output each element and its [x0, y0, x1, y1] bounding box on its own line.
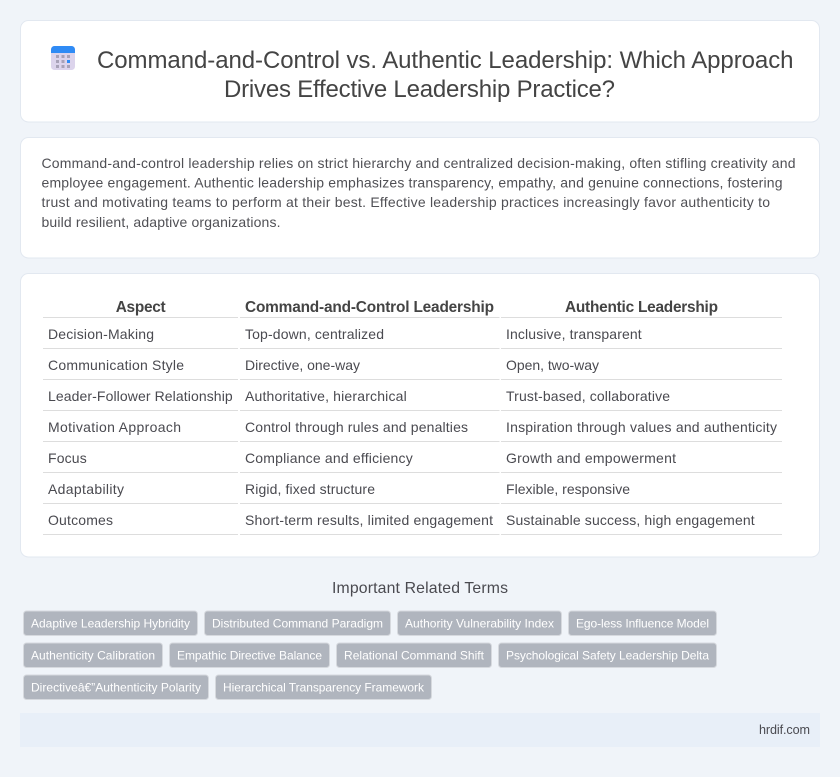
table row: decision-making: Inclusive, transparent: [506, 326, 642, 342]
panel: description: [20, 138, 820, 258]
tag: Authority Vulnerability Index: [405, 616, 554, 630]
tag: Directiveâ€”Authenticity Polarity: [31, 680, 201, 694]
text block: description: build resilient, adaptive organizations.: [42, 214, 280, 230]
title: Drives Effective Leadership Practice?: [224, 76, 615, 103]
table row: outcomes: Short-term results, limited engagement: [245, 512, 493, 528]
table row: communication style: Communication Style: [48, 357, 184, 373]
tag: [216, 675, 432, 700]
table row: decision-making: [48, 326, 642, 342]
tag: [170, 643, 330, 668]
title: Command-and-Control vs. Authentic Leadership: Which Approach: [97, 47, 794, 74]
table row: adaptability: [48, 481, 630, 497]
panel: comparison table: [20, 274, 820, 557]
tag: [568, 611, 716, 636]
tag: [24, 611, 198, 636]
table row: adaptability: Flexible, responsive: [506, 481, 630, 497]
table row: outcomes: Outcomes: [48, 512, 113, 528]
table row: focus: Compliance and efficiency: [245, 450, 413, 466]
tag: [498, 643, 716, 668]
table row: leader-follower relationship: Trust-based, collaborative: [506, 388, 670, 404]
table header: Authentic Leadership: [565, 299, 718, 316]
table row: motivation approach: Control through rules and penalties: [245, 419, 468, 435]
table row: focus: Growth and empowerment: [506, 450, 676, 466]
tag: Relational Command Shift: [344, 648, 485, 662]
tag: Authenticity Calibration: [31, 648, 155, 662]
heading: important related terms: Important Related Terms: [332, 580, 508, 597]
panel: title header: [20, 20, 820, 122]
table row: communication style: Directive, one-way: [245, 357, 360, 373]
tag: [24, 643, 162, 668]
text block: description: Command-and-control leadership relies on strict hierarchy and centralized decision-making, often stifling creativity and: [42, 155, 796, 171]
tag list: [24, 611, 716, 700]
table row: decision-making: Top-down, centralized: [245, 326, 384, 342]
tag: [204, 611, 390, 636]
tag: [336, 643, 492, 668]
icon: calendar: [51, 46, 75, 70]
table row: motivation approach: Motivation Approach: [48, 419, 181, 435]
table row: communication style: [48, 357, 599, 373]
tag: Ego-less Influence Model: [576, 616, 709, 630]
table row: decision-making: Decision-Making: [48, 326, 154, 342]
table row: adaptability: Adaptability: [48, 481, 124, 497]
tag: Empathic Directive Balance: [177, 648, 322, 662]
tag: [24, 675, 208, 700]
tag: Adaptive Leadership Hybridity: [31, 616, 190, 630]
table row: leader-follower relationship: Leader-Follower Relationship: [48, 388, 233, 404]
table row: outcomes: Sustainable success, high engagement: [506, 512, 755, 528]
table row: motivation approach: Inspiration through values and authenticity: [506, 419, 777, 435]
table header: [116, 299, 718, 316]
tag: [398, 611, 562, 636]
tag: Psychological Safety Leadership Delta: [506, 648, 709, 662]
table row: focus: Focus: [48, 450, 87, 466]
tag: Hierarchical Transparency Framework: [223, 680, 425, 694]
title: [97, 47, 794, 103]
footer: [20, 713, 820, 747]
text block: description: [42, 155, 796, 230]
table row: adaptability: Rigid, fixed structure: [245, 481, 375, 497]
text block: description: employee engagement. Authentic leadership emphasizes transparency, empathy, and genuine connections, fostering: [42, 175, 782, 191]
table row: leader-follower relationship: [48, 388, 670, 404]
footer: hrdif.com: [759, 723, 810, 737]
table row: focus: [48, 450, 676, 466]
table row: outcomes: [48, 512, 755, 528]
table header: Aspect: [116, 299, 166, 316]
table row: motivation approach: [48, 419, 777, 435]
table header: Command-and-Control Leadership: [245, 299, 494, 316]
tag: Distributed Command Paradigm: [212, 616, 383, 630]
text block: description: trust and motivating teams to perform at their best. Effective leadership practices increasingly favor authenticity to: [42, 194, 770, 210]
table row: leader-follower relationship: Authoritative, hierarchical: [245, 388, 407, 404]
table row: communication style: Open, two-way: [506, 357, 599, 373]
